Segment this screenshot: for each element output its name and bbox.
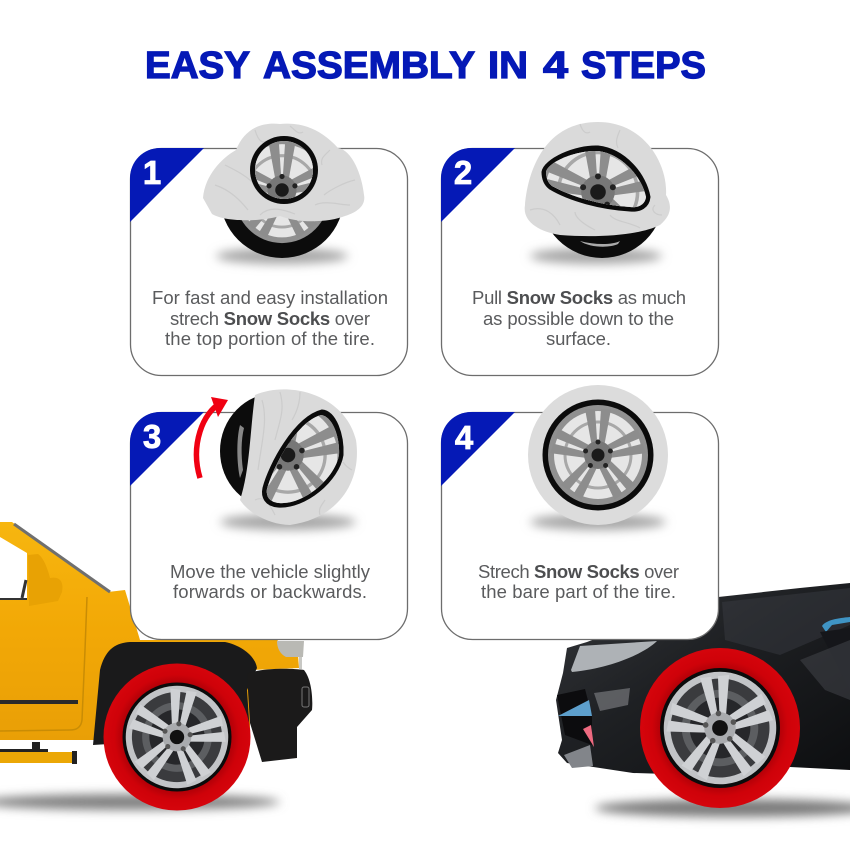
- car ground shadow: [595, 799, 850, 817]
- number badge: [130, 148, 204, 222]
- step 3 text: forwards or backwards.: [173, 581, 367, 602]
- truck door outline: [0, 597, 87, 731]
- title: IN: [488, 45, 528, 87]
- car wheel with red sock: [640, 648, 800, 808]
- step number 4: 4: [455, 419, 474, 456]
- step 1 text: the top portion of the tire.: [165, 328, 375, 349]
- title: [145, 45, 706, 87]
- step 1 text: [152, 287, 388, 349]
- truck door trim: [0, 700, 78, 704]
- step 1 text: For fast and easy installation: [152, 287, 388, 308]
- car pink stripe: [583, 725, 594, 747]
- car headlight: [571, 641, 657, 672]
- truck wheel with red sock: [104, 664, 250, 810]
- step 3 text: [170, 561, 371, 602]
- car fog lamp: [564, 745, 593, 768]
- card frame: [442, 148, 718, 376]
- icon: wheel with sock pulled down: [525, 122, 670, 264]
- card frame: [130, 148, 408, 376]
- step 2 text: Pull Snow Socks as much: [472, 287, 686, 308]
- step 4 text: Strech Snow Socks over: [478, 561, 679, 582]
- car side reflection: [800, 640, 850, 700]
- truck ground shadow: [0, 794, 280, 810]
- number badge: [441, 412, 515, 486]
- title: STEPS: [581, 45, 706, 87]
- icon: wheel with sock over top: [203, 124, 364, 264]
- arrow: red rotation arrow: [197, 397, 228, 478]
- car bumper intake: [557, 689, 592, 745]
- truck windshield strip: [14, 524, 110, 592]
- car hood sheen: [722, 588, 850, 655]
- step 4 text: the bare part of the tire.: [481, 581, 676, 602]
- step 1 text: strech Snow Socks over: [170, 308, 370, 329]
- step number 3: 3: [143, 418, 161, 455]
- card frame: [442, 412, 718, 640]
- card frame: [130, 412, 408, 640]
- title: 4: [543, 45, 568, 87]
- panel: step 2: [441, 122, 718, 376]
- car mirror trim: [822, 617, 850, 632]
- step number 2: 2: [454, 154, 472, 191]
- truck headlight: [277, 641, 304, 657]
- title: ASSEMBLY: [263, 45, 475, 87]
- car bumper highlight: [594, 688, 630, 711]
- step number 1: 1: [143, 154, 161, 191]
- number badge: [441, 148, 515, 222]
- panel: step 3: [130, 389, 408, 640]
- step 2 text: [472, 287, 686, 349]
- panel: step 4: [441, 385, 718, 640]
- title: EASY: [145, 45, 250, 87]
- truck mirror: [28, 554, 62, 606]
- panel: step 1: [130, 124, 408, 376]
- step 4 text: [478, 561, 679, 602]
- step 3 text: Move the vehicle slightly: [170, 561, 371, 582]
- step 2 text: as possible down to the: [483, 308, 674, 329]
- icon: wheel rolled forward: [220, 389, 357, 530]
- yellow truck: [0, 522, 312, 810]
- car body: [556, 583, 850, 775]
- truck body: [0, 522, 299, 740]
- black car: [556, 583, 850, 817]
- number badge: [130, 412, 204, 486]
- truck running board: [0, 742, 77, 764]
- truck fender arch: [93, 642, 257, 745]
- truck side window: [0, 537, 27, 598]
- truck bumper: [247, 669, 312, 762]
- car blue stripe: [558, 700, 592, 716]
- step 2 text: surface.: [546, 328, 611, 349]
- icon: fully covered wheel: [528, 385, 668, 530]
